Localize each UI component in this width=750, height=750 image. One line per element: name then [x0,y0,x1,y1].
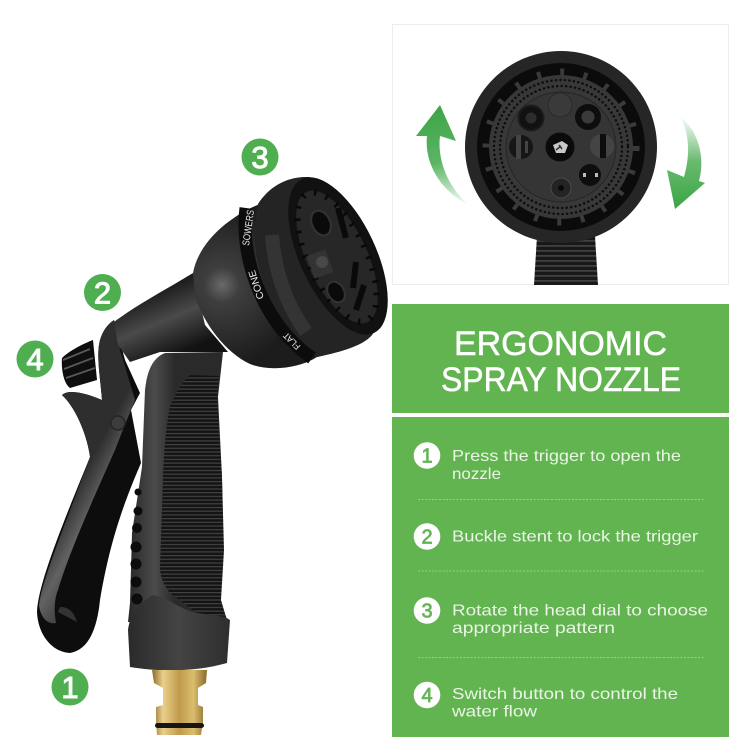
neck barrel [114,273,228,362]
step 1: nozzle [452,466,501,483]
spray openings [518,106,544,130]
step 1: 1 [421,446,433,468]
step 4 [414,682,678,720]
callout badge 1: 1 [61,670,79,705]
rear grip dots [130,488,142,604]
adjustment knob [62,340,97,388]
translucent dial ring [255,177,379,357]
panel: title [392,304,729,413]
step 1: Press the trigger to open the [452,448,681,465]
nozzle face [268,163,408,349]
brass connector [152,670,207,735]
step 2: Buckle stent to lock the trigger [452,528,699,546]
step 1 [414,442,681,483]
panel: instructions [392,417,729,737]
callout badge 1 [52,668,88,706]
handle [128,352,228,622]
nozzle head [193,163,408,368]
callout badge 2 [84,274,121,311]
panel: rotating dial photo [392,24,728,285]
callout badge 4 [16,340,54,378]
callout badge 3 [242,138,278,176]
callout badge 4: 4 [26,342,44,377]
base collar [128,595,230,670]
step 4: water flow [451,704,538,720]
title heading [441,325,681,399]
callout badge 2: 2 [94,276,111,310]
printed dial band [245,208,312,358]
step 2 [414,523,699,550]
dial head front view [465,51,657,243]
step 3: 3 [421,600,433,622]
hose neck [534,236,598,285]
ribbed grip [160,375,226,617]
center jet [546,132,574,162]
rotation arrow: down [667,116,705,209]
rotation arrow: up [416,105,470,206]
title heading: ERGONOMIC [454,325,667,363]
step 2: 2 [421,526,433,548]
dial label: shower: SOWERS [241,209,257,246]
step 3 [414,597,708,637]
spray gun photo illustration [37,163,408,735]
dial label: flat: FLAT [281,330,302,352]
dial label: cone: CONE [247,268,267,300]
callout badge 3: 3 [251,140,269,175]
step 4: 4 [421,685,433,707]
title heading: SPRAY NOZZLE [441,361,681,399]
trigger [37,320,141,653]
step 3: appropriate pattern [452,620,615,637]
step 3: Rotate the head dial to choose [452,602,708,620]
step 4: Switch button to control the [452,686,678,703]
